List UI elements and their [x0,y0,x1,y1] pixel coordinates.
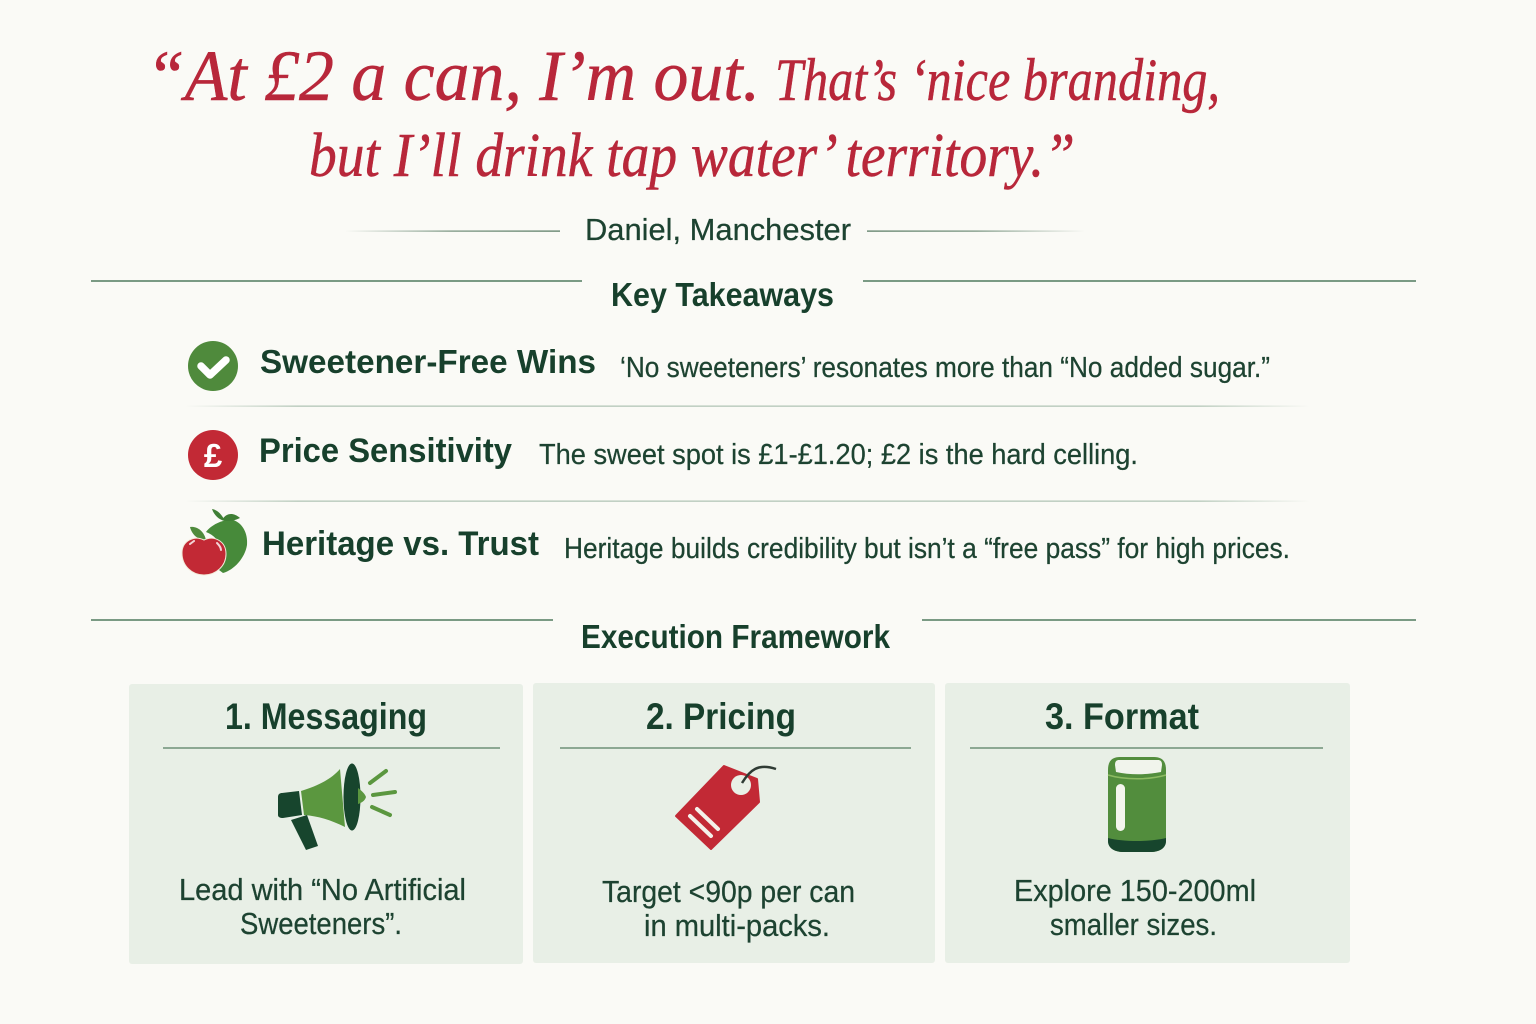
icon: price tag [676,766,776,849]
heading: key takeaways: Key Takeaways [611,276,834,313]
panel: format: 3. Format [1045,696,1199,737]
panel: messaging: Sweeteners”. [240,906,402,941]
panel: messaging: 1. Messaging [225,696,427,737]
icon: can [1108,757,1166,852]
icon: pound: £ [204,437,223,474]
quote [146,36,1220,190]
panel: format: smaller sizes. [1050,907,1217,942]
panel: pricing: in multi-packs. [644,908,830,943]
attribution: Daniel, Manchester [585,212,851,247]
panel: pricing: 2. Pricing [646,696,796,737]
panel: format [945,683,1350,963]
panel: pricing: Target <90p per can [602,874,855,909]
takeaway: heritage vs trust: Heritage vs. Trust [262,525,539,563]
takeaway: sweetener-free wins [188,341,1270,391]
quote: “At £2 a can, I’m out. [146,36,760,116]
takeaway: heritage vs trust: Heritage builds credibility but isn’t a “free pass” for high prices. [564,533,1290,565]
takeaway: heritage vs trust [182,509,1290,575]
panel: messaging: Lead with “No Artificial [179,872,466,907]
panel: pricing [533,683,935,963]
takeaway: price sensitivity: Price Sensitivity [259,432,512,470]
panel: format: Explore 150-200ml [1014,873,1256,908]
takeaway: price sensitivity: The sweet spot is £1-£1.20; £2 is the hard celling. [539,439,1138,471]
quote: That’s ‘nice branding, [775,47,1220,113]
takeaway: sweetener-free wins: ‘No sweeteners’ resonates more than “No added sugar.” [620,352,1270,384]
icon: megaphone [278,764,395,850]
icon: green check [188,341,238,391]
icon: apple and leaf [182,509,247,575]
quote: but I’ll drink tap water’ territory.” [309,122,1075,190]
icon: pound [188,430,238,480]
panel: messaging [129,684,523,964]
takeaway: price sensitivity [188,430,1138,480]
heading: execution framework: Execution Framework [581,618,891,655]
takeaway: sweetener-free wins: Sweetener-Free Wins [260,343,596,380]
